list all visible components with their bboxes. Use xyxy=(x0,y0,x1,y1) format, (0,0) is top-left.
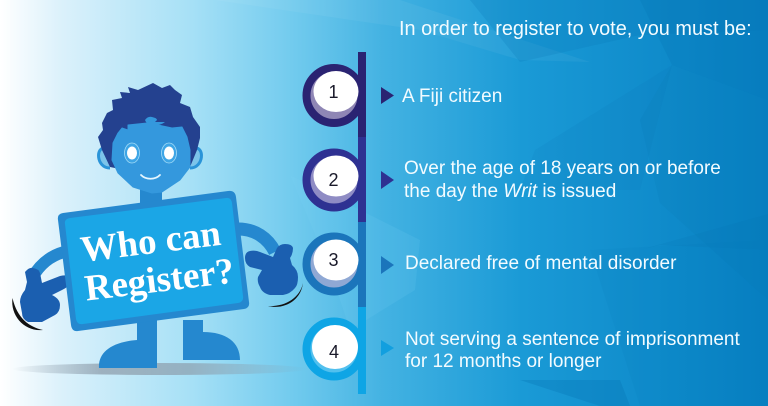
ground shadow xyxy=(12,363,308,375)
step 2: 2 xyxy=(328,170,339,190)
arrow 2 xyxy=(381,171,394,189)
step 4: 4 xyxy=(329,342,339,362)
motion swoosh right xyxy=(268,283,303,307)
step 4 xyxy=(306,322,362,376)
step 2 xyxy=(306,152,362,208)
smile xyxy=(141,175,160,179)
sign text xyxy=(78,212,236,310)
left arm xyxy=(32,252,64,278)
right ear xyxy=(190,148,201,168)
left leg and foot xyxy=(99,320,157,368)
timeline bar xyxy=(358,52,366,394)
item 4 text: Not serving a sentence of imprisonment xyxy=(405,329,740,350)
step 3 xyxy=(306,236,362,292)
item 4 text xyxy=(405,329,740,372)
hair xyxy=(98,83,200,175)
neck xyxy=(140,188,162,206)
right leg and foot xyxy=(183,320,240,360)
item 1 text: A Fiji citizen xyxy=(402,86,502,107)
left eye xyxy=(124,143,140,163)
sign text: Register? xyxy=(82,251,236,310)
right eye xyxy=(162,143,176,163)
sign face xyxy=(65,198,243,324)
item 3 text: Declared free of mental disorder xyxy=(405,253,677,274)
sign board xyxy=(58,191,249,331)
item 2 text xyxy=(404,158,721,202)
step 1: 1 xyxy=(328,82,339,102)
face xyxy=(112,123,190,193)
right arm xyxy=(238,229,275,252)
arrow 4 xyxy=(381,340,394,356)
item 4 text: for 12 months or longer xyxy=(405,351,602,372)
item 2 text: the day the Writ is issued xyxy=(404,181,616,202)
step 3: 3 xyxy=(328,250,339,270)
hair curl xyxy=(145,117,165,125)
arrow 3 xyxy=(381,256,394,274)
arrow 1 xyxy=(381,87,394,104)
left hand xyxy=(20,268,72,322)
sign text: Who can xyxy=(78,213,223,271)
step 1 xyxy=(306,68,362,123)
right hand xyxy=(245,244,298,295)
character: Who can Register? mascot xyxy=(12,83,308,375)
heading: In order to register to vote, you must be: xyxy=(399,18,752,40)
left ear xyxy=(99,148,110,168)
item 2 text: Over the age of 18 years on or before xyxy=(404,158,721,179)
motion swoosh left xyxy=(12,298,43,330)
